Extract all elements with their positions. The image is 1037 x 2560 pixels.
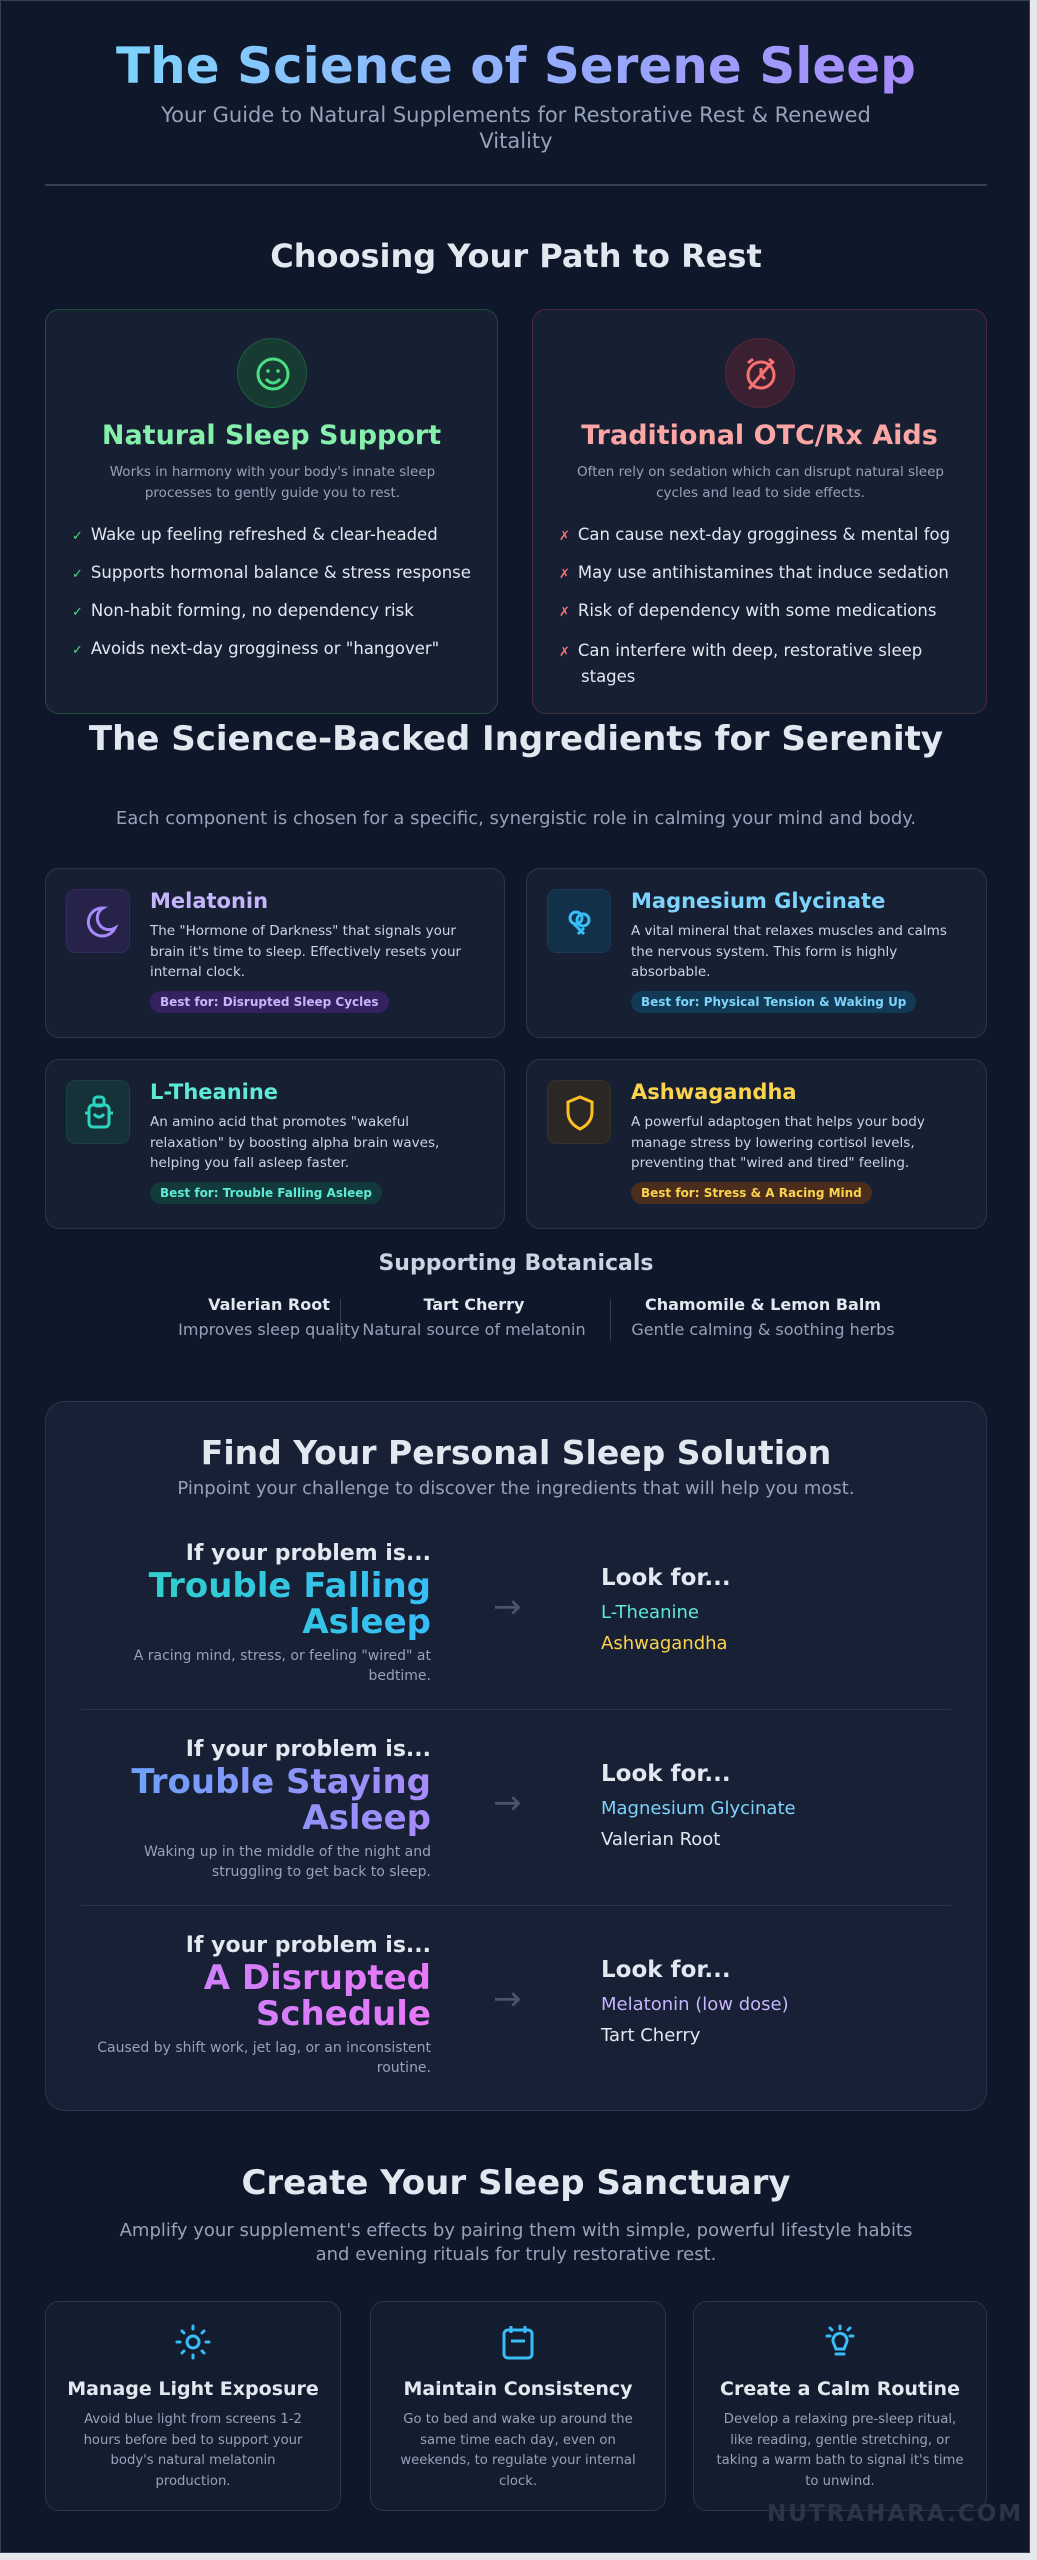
icon: hearts xyxy=(547,889,611,953)
row: disrupted schedule: Caused by shift work, jet lag, or an inconsistent routine. xyxy=(97,2040,431,2076)
subheading: Amplify your supplement's effects by pairing them with simple, powerful lifestyle habits and evening rituals for truly restorative rest. xyxy=(120,2220,912,2265)
botanicals list: Chamomile & Lemon Balm xyxy=(645,1295,881,1314)
badge: Best for: Stress & A Racing Mind xyxy=(641,1186,862,1200)
tip: light: Avoid blue light from screens 1-2 hours before bed to support your body's natural melatonin production. xyxy=(84,2412,302,2488)
panel: natural sleep support xyxy=(45,309,498,714)
botanicals list: Improves sleep quality xyxy=(178,1320,360,1339)
card: ashwagandha: Ashwagandha xyxy=(631,1080,797,1104)
row: disrupted schedule: Look for... xyxy=(601,1957,731,1983)
list: drawbacks: ✗ May use antihistamines that induce sedation xyxy=(559,563,949,582)
tip: routine xyxy=(693,2301,987,2511)
card: ashwagandha: A powerful adaptogen that helps your body manage stress by lowering cortisol levels, preventing that "wired and tired" feeling. xyxy=(631,1114,925,1171)
row: trouble falling asleep: If your problem is... xyxy=(186,1541,431,1566)
card: melatonin: Melatonin xyxy=(150,889,268,913)
badge xyxy=(631,991,916,1013)
card: magnesium xyxy=(526,868,987,1038)
arrow: → xyxy=(493,1979,522,2019)
row: trouble staying asleep: Valerian Root xyxy=(601,1829,720,1850)
heading: sanctuary: Create Your Sleep Sanctuary xyxy=(241,2163,791,2203)
subheading: Pinpoint your challenge to discover the ingredients that will help you most. xyxy=(177,1478,855,1499)
list: benefits: ✓ Avoids next-day grogginess or "hangover" xyxy=(72,639,439,658)
badge: Best for: Physical Tension & Waking Up xyxy=(641,995,906,1009)
icon: sun xyxy=(176,2324,210,2360)
heading: supporting botanicals: Supporting Botanicals xyxy=(378,1251,654,1276)
panel: personal sleep solution xyxy=(45,1401,987,2111)
tip: consistency xyxy=(370,2301,666,2511)
row: trouble falling asleep: Ashwagandha xyxy=(601,1633,728,1654)
botanicals list: Natural source of melatonin xyxy=(362,1320,586,1339)
subheading: Each component is chosen for a specific, synergistic role in calming your mind and body. xyxy=(116,808,916,829)
botanicals list xyxy=(178,1295,895,1341)
botanicals list: Gentle calming & soothing herbs xyxy=(631,1320,895,1339)
row: trouble staying asleep: Waking up in the middle of the night and struggling to get back to sleep. xyxy=(144,1844,431,1880)
arrow: → xyxy=(493,1783,522,1823)
tip: light: Manage Light Exposure xyxy=(67,2378,319,2400)
card: melatonin: The "Hormone of Darkness" that signals your brain it's time to sleep. Effectively resets your internal clock. xyxy=(150,923,461,980)
arrow: → xyxy=(493,1587,522,1627)
botanicals list: Tart Cherry xyxy=(424,1295,524,1314)
list: benefits: ✓ Non-habit forming, no dependency risk xyxy=(72,601,414,620)
badge xyxy=(150,991,389,1013)
row: disrupted schedule: A Disrupted Schedule xyxy=(204,1958,431,2034)
card: melatonin xyxy=(45,868,505,1038)
row: trouble staying asleep xyxy=(131,1737,796,1880)
heading: ingredients: The Science-Backed Ingredients for Serenity xyxy=(89,719,943,759)
icon: calendar xyxy=(502,2326,534,2360)
description: Often rely on sedation which can disrupt natural sleep cycles and lead to side effects. xyxy=(577,464,944,500)
row: trouble staying asleep: Trouble Staying Asleep xyxy=(131,1762,431,1838)
title: The Science of Serene Sleep xyxy=(116,37,916,95)
row: trouble falling asleep: Look for... xyxy=(601,1565,731,1591)
card title: Natural Sleep Support xyxy=(102,420,441,451)
row: disrupted schedule: If your problem is... xyxy=(186,1933,431,1958)
row: trouble falling asleep: Trouble Falling Asleep xyxy=(149,1566,431,1642)
list: drawbacks: ✗ Can cause next-day grogginess & mental fog xyxy=(559,525,950,544)
row: trouble staying asleep: If your problem is... xyxy=(186,1737,431,1762)
icon: shield xyxy=(547,1080,611,1144)
list: drawbacks: ✗ Risk of dependency with some medications xyxy=(559,601,936,620)
card: magnesium: Magnesium Glycinate xyxy=(631,889,885,913)
icon: smiley xyxy=(237,338,307,408)
card title: Traditional OTC/Rx Aids xyxy=(581,420,938,451)
card: l-theanine xyxy=(45,1059,505,1229)
icon: alarm clock xyxy=(725,338,795,408)
badge: Best for: Trouble Falling Asleep xyxy=(160,1186,372,1200)
row: trouble falling asleep xyxy=(134,1541,731,1684)
card: l-theanine: L-Theanine xyxy=(150,1080,278,1104)
badge xyxy=(150,1182,382,1204)
heading: choosing path: Choosing Your Path to Rest xyxy=(270,237,762,275)
row: trouble falling asleep: A racing mind, stress, or feeling "wired" at bedtime. xyxy=(134,1648,431,1684)
row: trouble falling asleep: L-Theanine xyxy=(601,1602,699,1623)
row: trouble staying asleep: Magnesium Glycinate xyxy=(601,1798,796,1819)
badge: Best for: Disrupted Sleep Cycles xyxy=(160,995,379,1009)
tip: routine: Develop a relaxing pre-sleep ritual, like reading, gentle stretching, or taking a warm bath to signal it's time to unwind. xyxy=(717,2412,963,2488)
watermark: NUTRAHARA.COM xyxy=(767,2501,1023,2527)
botanicals list: Valerian Root xyxy=(208,1295,330,1314)
row: disrupted schedule: Tart Cherry xyxy=(601,2025,700,2046)
list: benefits xyxy=(72,525,471,658)
icon: lightbulb xyxy=(826,2324,854,2356)
heading: Find Your Personal Sleep Solution xyxy=(201,1433,831,1472)
list: benefits: ✓ Supports hormonal balance & stress response xyxy=(72,563,471,582)
icon: moon xyxy=(66,889,130,953)
tip: routine: Create a Calm Routine xyxy=(720,2378,960,2400)
list: drawbacks: ✗ Can interfere with deep, restorative sleep stages xyxy=(559,641,922,686)
row: disrupted schedule: Melatonin (low dose) xyxy=(601,1994,789,2015)
description: Works in harmony with your body's innate sleep processes to gently guide you to rest. xyxy=(110,464,435,500)
subtitle: Your Guide to Natural Supplements for Restorative Rest & Renewed Vitality xyxy=(161,103,871,153)
card: l-theanine: An amino acid that promotes "wakeful relaxation" by boosting alpha brain waves, helping you fall asleep faster. xyxy=(150,1114,439,1171)
tip: consistency: Maintain Consistency xyxy=(403,2378,633,2400)
icon: robot xyxy=(66,1080,130,1144)
list: benefits: ✓ Wake up feeling refreshed & clear-headed xyxy=(72,525,438,544)
tip: consistency: Go to bed and wake up around the same time each day, even on weekends, to regulate your internal clock. xyxy=(400,2412,636,2488)
panel: traditional aids xyxy=(532,309,987,714)
tip: light xyxy=(45,2301,341,2511)
badge xyxy=(631,1182,872,1204)
row: trouble staying asleep: Look for... xyxy=(601,1761,731,1787)
card: ashwagandha xyxy=(526,1059,987,1229)
row: disrupted schedule xyxy=(97,1933,789,2076)
card: magnesium: A vital mineral that relaxes muscles and calms the nervous system. This form is highly absorbable. xyxy=(631,923,947,980)
list: drawbacks xyxy=(559,525,950,686)
